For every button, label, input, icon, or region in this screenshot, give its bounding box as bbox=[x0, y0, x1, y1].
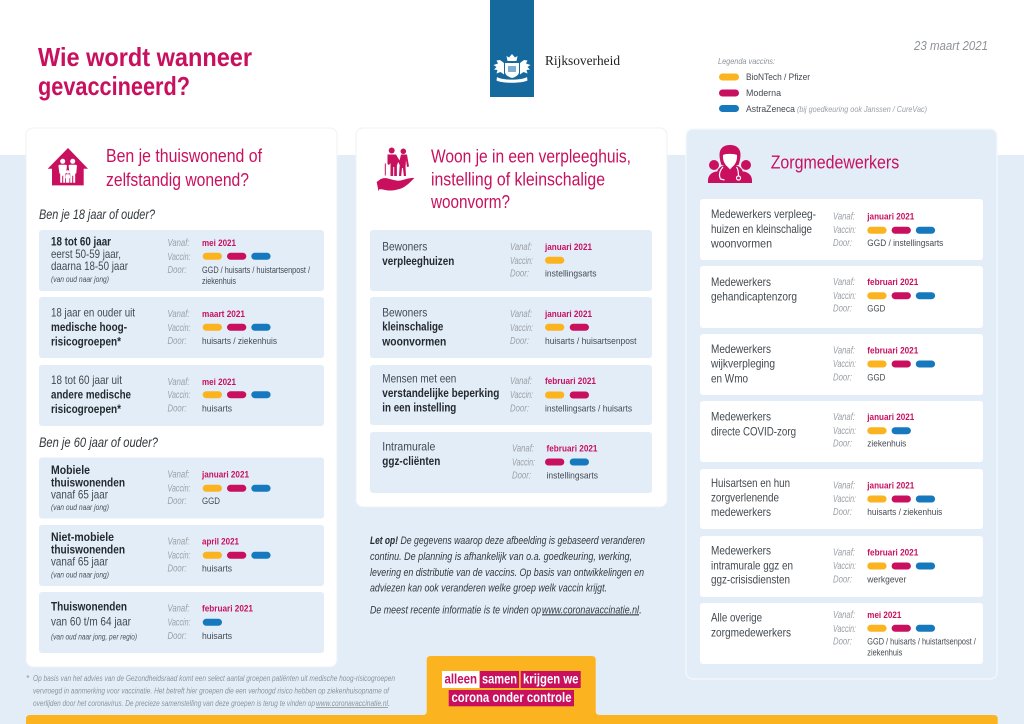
row: 18 tot 60 jaar: Vaccin: bbox=[168, 252, 191, 263]
row: intramurale ggz: intramurale ggz en bbox=[711, 558, 793, 572]
slogan: samen bbox=[482, 672, 517, 686]
row: wijkverpleging: wijkverpleging bbox=[710, 357, 775, 371]
row: gehandicaptenzorg: gehandicaptenzorg bbox=[711, 289, 797, 303]
row: verpleeghuizen medewerkers: Vaccin: bbox=[833, 225, 856, 236]
heading: Woon je in een verpleeghuis, bbox=[431, 147, 631, 167]
subheading 60+: Ben je 60 jaar of ouder? bbox=[39, 434, 158, 450]
row: medische hoog-risicogroepen: Vanaf: bbox=[168, 309, 190, 320]
row: kleinschalige woonvormen: woonvormen bbox=[381, 335, 446, 349]
row: andere medische risicogroepen: Door: bbox=[168, 404, 187, 414]
row: verstandelijke beperking bbox=[370, 365, 652, 425]
heading: instelling of kleinschalige bbox=[431, 170, 605, 190]
row: kleinschalige woonvormen: Vaccin: bbox=[510, 323, 533, 334]
row: niet-mobiele thuiswonenden: vanaf 65 jaar bbox=[51, 554, 108, 568]
logo: Rijksoverheid bbox=[490, 0, 620, 97]
row: gehandicaptenzorg: Vanaf: bbox=[833, 277, 855, 288]
row: thuiswonenden 60 t/m 64 bbox=[39, 592, 324, 653]
row: ggz-clienten: ggz-cliënten bbox=[382, 454, 440, 468]
row: medische hoog-risicogroepen: maart 2021 bbox=[202, 309, 246, 320]
row: verpleeghuizen medewerkers: GGD / instellingsarts bbox=[867, 238, 944, 249]
row: huisartsen: medewerkers bbox=[711, 505, 771, 519]
legend: vaccines bbox=[718, 56, 927, 115]
row: mobiele thuiswonenden: Vaccin: bbox=[168, 484, 191, 494]
row: medische hoog-risicogroepen: Vaccin: bbox=[168, 323, 191, 334]
row: andere medische risicogroepen bbox=[39, 365, 324, 426]
row: medische hoog-risicogroepen: Door: bbox=[168, 336, 187, 347]
row: verpleeghuizen medewerkers: Vanaf: bbox=[833, 211, 855, 222]
icon: medical staff bbox=[708, 145, 752, 183]
slogan: corona onder controle bbox=[452, 690, 572, 705]
row: huisartsen: Huisartsen en hun bbox=[711, 476, 790, 490]
row: kleinschalige woonvormen: januari 2021 bbox=[544, 309, 593, 320]
row: medische hoog-risicogroepen: medische hoog- bbox=[51, 320, 127, 334]
heading: zelfstandig wonend? bbox=[106, 170, 249, 190]
slogan bbox=[442, 671, 581, 706]
text block: let op: . bbox=[639, 604, 642, 616]
row: verpleeghuizen medewerkers: Medewerkers verpleeg- bbox=[711, 207, 816, 221]
legend: vaccines: AstraZeneca bbox=[746, 104, 796, 115]
text block: let op: adviezen kan ook veranderen welke groep welk vaccin krijgt. bbox=[370, 583, 607, 595]
row: 18 tot 60 jaar: Door: bbox=[168, 265, 187, 276]
row: alle overige bbox=[700, 603, 983, 664]
heading bbox=[430, 147, 631, 212]
row: mobiele thuiswonenden: januari 2021 bbox=[201, 470, 250, 480]
row: andere medische risicogroepen: Vanaf: bbox=[168, 377, 190, 388]
panel: thuiswonend bbox=[26, 128, 337, 667]
row: verpleeghuizen: Vanaf: bbox=[510, 242, 532, 253]
row: verpleeghuizen bbox=[370, 230, 652, 291]
row: niet-mobiele thuiswonenden: april 2021 bbox=[202, 537, 240, 548]
icon: house with family bbox=[48, 148, 88, 185]
row: 18 tot 60 jaar: Vanaf: bbox=[168, 238, 190, 249]
title bbox=[38, 42, 252, 101]
row: intramurale ggz: februari 2021 bbox=[867, 547, 919, 558]
row: niet-mobiele thuiswonenden: (van oud naar jong) bbox=[51, 571, 109, 580]
row: intramurale ggz: Vaccin: bbox=[833, 561, 856, 572]
row: intramurale ggz: werkgever bbox=[866, 575, 906, 586]
footnote bbox=[26, 674, 395, 708]
row: ggz-clienten: Vaccin: bbox=[512, 458, 535, 468]
row: alle overige: zorgmedewerkers bbox=[711, 625, 791, 639]
row: verpleeghuizen medewerkers: januari 2021 bbox=[866, 211, 915, 222]
row: medische hoog-risicogroepen: huisarts / ziekenhuis bbox=[202, 336, 277, 347]
row: thuiswonenden 60 t/m 64: huisarts bbox=[202, 631, 232, 642]
row: ggz-clienten: Vanaf: bbox=[512, 443, 534, 454]
row: niet-mobiele thuiswonenden: Door: bbox=[168, 563, 187, 574]
row: ggz-clienten: Door: bbox=[512, 471, 531, 482]
row: 18 tot 60 jaar: 18 tot 60 jaar bbox=[51, 234, 111, 248]
row: alle overige: Vaccin: bbox=[833, 624, 856, 635]
row: kleinschalige woonvormen bbox=[370, 297, 652, 358]
row: verpleeghuizen medewerkers: woonvormen bbox=[710, 237, 772, 251]
footnote: vervroegd in aanmerking voor vaccinatie. Het betreft hier groepen die een verhoogd risico hebben op ziekenhuisopname of bbox=[33, 686, 390, 696]
row: niet-mobiele thuiswonenden: thuiswonenden bbox=[51, 543, 125, 557]
row: verstandelijke beperking: Door: bbox=[510, 403, 529, 414]
heading: woonvorm? bbox=[430, 192, 510, 212]
row: 18 tot 60 jaar: (van oud naar jong) bbox=[51, 275, 109, 284]
row: andere medische risicogroepen: 18 tot 60 jaar uit bbox=[51, 373, 123, 387]
row: verpleeghuizen: januari 2021 bbox=[544, 242, 593, 253]
row: verstandelijke beperking: in een instelling bbox=[382, 401, 456, 415]
row: thuiswonenden 60 t/m 64: van 60 t/m 64 jaar bbox=[51, 615, 131, 629]
row: verstandelijke beperking: Mensen met een bbox=[382, 372, 456, 386]
row: intramurale ggz: Vanaf: bbox=[833, 547, 855, 558]
date: 23 maart 2021 bbox=[913, 38, 988, 53]
panel: verpleeghuis bbox=[356, 128, 667, 507]
row: 18 tot 60 jaar: GGD / huisarts / huistartsenpost / bbox=[202, 265, 310, 276]
row: mobiele thuiswonenden: Vanaf: bbox=[168, 470, 190, 480]
row: wijkverpleging: februari 2021 bbox=[867, 345, 919, 356]
row: kleinschalige woonvormen: Bewoners bbox=[382, 306, 427, 320]
row: intramurale ggz: Medewerkers bbox=[711, 543, 771, 557]
row: intramurale ggz: Door: bbox=[833, 575, 852, 586]
row: directe COVID-zorg: Door: bbox=[833, 438, 852, 449]
row: medische hoog-risicogroepen bbox=[39, 297, 324, 358]
row: directe COVID-zorg: januari 2021 bbox=[866, 412, 915, 423]
row: verpleeghuizen medewerkers: huizen en kleinschalige bbox=[711, 222, 812, 236]
legend: vaccines: (bij goedkeuring ook Janssen / CureVac) bbox=[797, 104, 927, 114]
row: wijkverpleging: en Wmo bbox=[711, 371, 748, 385]
row: 18 tot 60 jaar: mei 2021 bbox=[202, 238, 237, 249]
row: andere medische risicogroepen: andere medische bbox=[51, 388, 131, 402]
row: thuiswonenden 60 t/m 64: Vanaf: bbox=[168, 604, 190, 615]
row: verpleeghuizen medewerkers: Door: bbox=[833, 238, 852, 249]
row: verpleeghuizen: verpleeghuizen bbox=[382, 254, 454, 268]
row: alle overige: GGD / huisarts / huistartsenpost / bbox=[867, 637, 976, 648]
text block: let op: levering en distributie van de vaccins. Op basis van ontwikkelingen en bbox=[370, 567, 644, 579]
text block: let op: De meest recente informatie is te vinden op bbox=[370, 604, 541, 616]
legend: vaccines: Legenda vaccins: bbox=[718, 56, 776, 66]
row: niet-mobiele thuiswonenden bbox=[39, 525, 324, 586]
row: kleinschalige woonvormen: huisarts / huisartsenpost bbox=[545, 336, 637, 347]
row: verpleeghuizen medewerkers bbox=[700, 199, 983, 260]
row: thuiswonenden 60 t/m 64: Door: bbox=[168, 631, 187, 642]
row: huisartsen: zorgverlenende bbox=[711, 491, 779, 505]
panel: zorgmedewerkers bbox=[686, 129, 997, 679]
row: alle overige: Door: bbox=[833, 637, 852, 648]
row: intramurale ggz bbox=[700, 536, 983, 597]
row: thuiswonenden 60 t/m 64: februari 2021 bbox=[202, 604, 254, 615]
row: thuiswonenden 60 t/m 64: (van oud naar jong, per regio) bbox=[51, 632, 137, 641]
row: medische hoog-risicogroepen: risicogroepen* bbox=[51, 334, 121, 348]
row: andere medische risicogroepen: huisarts bbox=[202, 404, 232, 414]
row: wijkverpleging: Medewerkers bbox=[711, 342, 771, 356]
row: mobiele thuiswonenden: vanaf 65 jaar bbox=[51, 487, 108, 501]
row: ggz-clienten bbox=[370, 432, 652, 493]
row: wijkverpleging bbox=[700, 334, 983, 395]
heading: Zorgmedewerkers bbox=[771, 152, 899, 172]
footnote: * bbox=[26, 674, 30, 683]
row: kleinschalige woonvormen: kleinschalige bbox=[382, 320, 444, 334]
text block: let op: Let op! bbox=[370, 535, 398, 547]
row: mobiele thuiswonenden: Mobiele bbox=[51, 463, 90, 477]
text block: let op bbox=[370, 535, 645, 616]
row: alle overige: Vanaf: bbox=[833, 610, 855, 621]
row: huisartsen: Door: bbox=[833, 507, 852, 518]
row: directe COVID-zorg: directe COVID-zorg bbox=[711, 424, 796, 438]
row: huisartsen: Vaccin: bbox=[833, 494, 856, 505]
legend: vaccines: BioNTech / Pfizer bbox=[746, 72, 810, 83]
row: huisartsen: Vanaf: bbox=[833, 480, 855, 491]
row: directe COVID-zorg: Vaccin: bbox=[833, 426, 856, 437]
row: mobiele thuiswonenden: Door: bbox=[168, 496, 187, 507]
row: andere medische risicogroepen: Vaccin: bbox=[168, 390, 191, 401]
row: verstandelijke beperking: Vaccin: bbox=[510, 390, 533, 401]
row: mobiele thuiswonenden bbox=[39, 458, 324, 518]
row: gehandicaptenzorg: Medewerkers bbox=[711, 275, 771, 289]
row: 18 tot 60 jaar bbox=[39, 230, 324, 291]
row: gehandicaptenzorg: GGD bbox=[867, 304, 885, 315]
footnote: overlijden door het coronavirus. De precieze samenstelling van deze groepen is terug te vinden op bbox=[33, 699, 315, 708]
row: huisartsen: januari 2021 bbox=[866, 480, 915, 491]
text block: let op: www.coronavaccinatie.nl bbox=[542, 604, 639, 616]
subheading 18+: Ben je 18 jaar of ouder? bbox=[39, 206, 155, 222]
row: thuiswonenden 60 t/m 64: Vaccin: bbox=[168, 618, 191, 628]
row: ggz-clienten: februari 2021 bbox=[546, 443, 598, 454]
row: alle overige: mei 2021 bbox=[867, 610, 902, 621]
row: thuiswonenden 60 t/m 64: Thuiswonenden bbox=[51, 600, 127, 614]
text block: let op: continu. De planning is afhankelijk van o.a. goedkeuring, werking, bbox=[370, 551, 632, 563]
row: directe COVID-zorg bbox=[700, 401, 983, 462]
row: wijkverpleging: GGD bbox=[867, 373, 885, 384]
row: gehandicaptenzorg: februari 2021 bbox=[867, 277, 919, 288]
row: huisartsen: huisarts / ziekenhuis bbox=[867, 507, 943, 518]
row: verpleeghuizen: Door: bbox=[510, 269, 529, 280]
row: alle overige: Alle overige bbox=[711, 611, 762, 625]
heading: Ben je thuiswonend of bbox=[106, 146, 263, 166]
footnote: www.coronavaccinatie.nl bbox=[316, 699, 388, 708]
row: niet-mobiele thuiswonenden: Niet-mobiele bbox=[51, 530, 114, 544]
row: verpleeghuizen: Bewoners bbox=[382, 240, 427, 254]
row: niet-mobiele thuiswonenden: huisarts bbox=[202, 563, 232, 574]
text block: let op: De gegevens waarop deze afbeelding is gebaseerd veranderen bbox=[400, 535, 645, 547]
row: verpleeghuizen: instellingsarts bbox=[545, 269, 597, 280]
row: ggz-clienten: Intramurale bbox=[382, 440, 436, 454]
row: verstandelijke beperking: instellingsarts / huisarts bbox=[545, 403, 632, 414]
title: gevaccineerd? bbox=[38, 71, 190, 101]
row: wijkverpleging: Vaccin: bbox=[833, 359, 856, 370]
slogan: alleen bbox=[444, 672, 477, 686]
logo: Rijksoverheid: Rijksoverheid bbox=[545, 54, 620, 69]
row: wijkverpleging: Door: bbox=[833, 373, 852, 384]
row: kleinschalige woonvormen: Door: bbox=[510, 336, 529, 347]
row: medische hoog-risicogroepen: 18 jaar en ouder uit bbox=[51, 306, 136, 320]
row: mobiele thuiswonenden: thuiswonenden bbox=[51, 476, 125, 490]
row: verstandelijke beperking: verstandelijke beperking bbox=[382, 386, 499, 400]
row: mobiele thuiswonenden: GGD bbox=[202, 496, 220, 507]
row: directe COVID-zorg: ziekenhuis bbox=[867, 438, 907, 449]
row: kleinschalige woonvormen: Vanaf: bbox=[510, 309, 532, 320]
row: alle overige: ziekenhuis bbox=[867, 648, 902, 659]
row: huisartsen bbox=[700, 469, 983, 529]
row: 18 tot 60 jaar: ziekenhuis bbox=[202, 276, 236, 287]
footnote: . bbox=[388, 699, 390, 708]
footnote: Op basis van het advies van de Gezondheidsraad komt een select aantal groepen patiënten uit medische hoog-risicogroepen bbox=[33, 674, 395, 683]
row: gehandicaptenzorg: Door: bbox=[833, 304, 852, 315]
legend: vaccines: Moderna bbox=[746, 88, 782, 99]
row: directe COVID-zorg: Vanaf: bbox=[833, 412, 855, 423]
row: verstandelijke beperking: februari 2021 bbox=[545, 376, 597, 387]
row: 18 tot 60 jaar: eerst 50-59 jaar, bbox=[51, 247, 121, 261]
title: Wie wordt wanneer bbox=[38, 42, 252, 72]
icon: elderly couple on hand bbox=[377, 148, 414, 191]
row: verpleeghuizen: Vaccin: bbox=[510, 256, 533, 267]
row: ggz-clienten: instellingsarts bbox=[546, 471, 598, 482]
footer bar with slogan tab bbox=[26, 656, 998, 724]
row: mobiele thuiswonenden: (van oud naar jong) bbox=[51, 503, 109, 512]
row: niet-mobiele thuiswonenden: Vanaf: bbox=[168, 537, 190, 548]
row: gehandicaptenzorg: Vaccin: bbox=[833, 291, 856, 302]
row: gehandicaptenzorg bbox=[700, 266, 983, 328]
row: andere medische risicogroepen: risicogroepen* bbox=[51, 402, 121, 416]
row: niet-mobiele thuiswonenden: Vaccin: bbox=[168, 550, 191, 562]
row: verstandelijke beperking: Vanaf: bbox=[510, 376, 532, 387]
row: directe COVID-zorg: Medewerkers bbox=[711, 409, 771, 423]
slogan: krijgen we bbox=[523, 672, 579, 686]
row: 18 tot 60 jaar: daarna 18-50 jaar bbox=[51, 259, 128, 273]
heading bbox=[106, 146, 263, 190]
row: andere medische risicogroepen: mei 2021 bbox=[202, 377, 237, 388]
row: wijkverpleging: Vanaf: bbox=[833, 345, 855, 356]
row: intramurale ggz: ggz-crisisdiensten bbox=[711, 573, 790, 587]
